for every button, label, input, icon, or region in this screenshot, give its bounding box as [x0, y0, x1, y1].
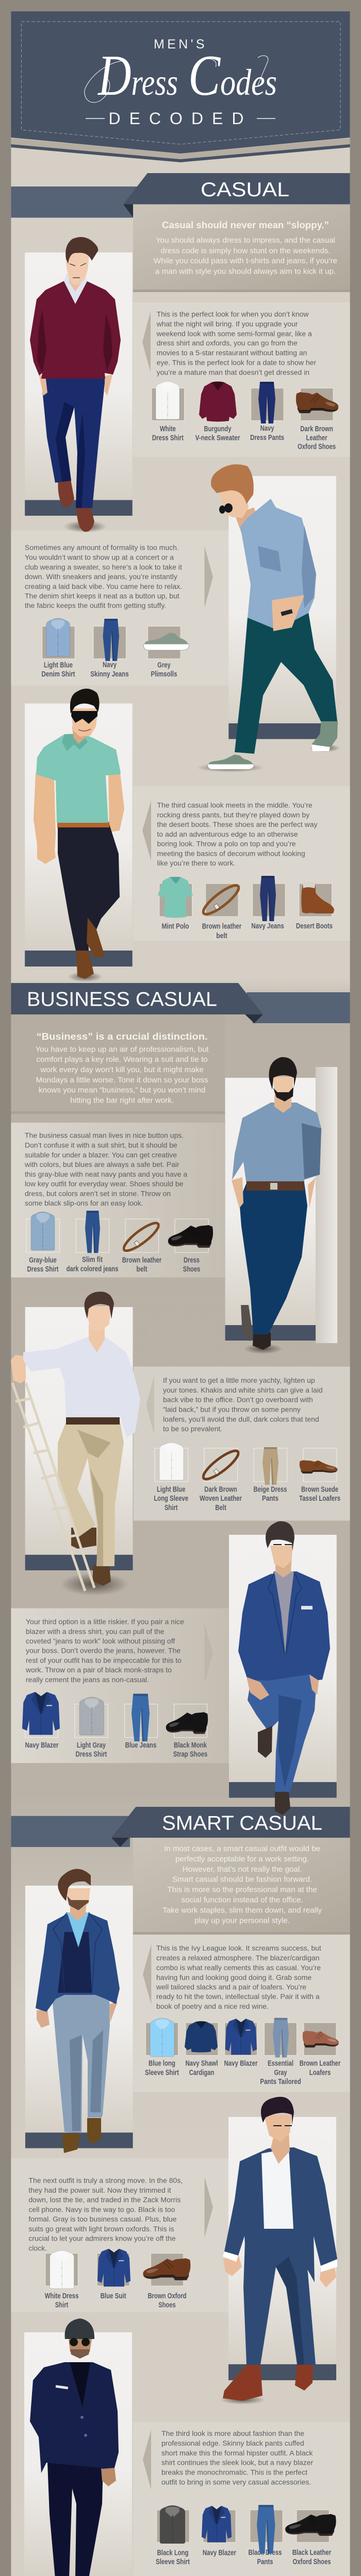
panel: business look 2 description: [134, 1367, 350, 1520]
item: navy dress pants: [250, 382, 284, 442]
description text: You wouldn’t want to show up at a concert or a: [25, 553, 174, 561]
item: blue shirt: Blue long: [149, 2060, 175, 2068]
ladder: [12, 1383, 94, 1591]
description text: [156, 310, 316, 376]
item: black shirt: Sleeve Shirt: [156, 2558, 190, 2566]
description text: blazer with a dress shirt, you can pull of the: [26, 1628, 165, 1636]
item: monk strap shoes: [166, 1704, 208, 1758]
description text: The denim shirt keeps it neat as a button up, but: [25, 591, 179, 600]
description text: breaks the monochromatic. This is the perfect: [161, 2468, 307, 2476]
banner: smart casual: [11, 1807, 350, 1847]
description text: creating a laid back vibe. You came here to relax.: [25, 582, 182, 590]
arrow: [142, 311, 151, 372]
panel: smart casual look 3 description: [133, 2422, 350, 2576]
intro text: While you could pass with t-shirts and jeans, if you’re: [154, 257, 337, 265]
item: black oxford shoes: Oxford Shoes: [293, 2558, 331, 2566]
item: monk strap shoes: Strap Shoes: [173, 1750, 207, 1758]
item: dark jeans: [66, 1211, 119, 1274]
item: denim shirt: Denim Shirt: [41, 670, 75, 679]
arrow: [204, 2177, 213, 2238]
item: brown oxford shoes: Dark Brown: [300, 425, 333, 433]
item: navy blazer: [224, 2019, 258, 2068]
item: woven belt: Dark Brown: [204, 1486, 237, 1494]
description text: low key outfit for everyday wear. Shoes should be: [25, 1179, 184, 1188]
item: dark jeans: dark colored jeans: [66, 1265, 119, 1274]
item: gray pants: Essential: [268, 2060, 293, 2068]
description text: crucial to let your admirers know you’re off the: [28, 2234, 176, 2243]
item: blue shirt: Sleeve Shirt: [145, 2069, 179, 2077]
item: brown loafers: Brown Leather: [300, 2060, 341, 2068]
item: skinny jeans: [90, 619, 129, 679]
description text: dress shirt and oxfords, you can go from the: [157, 339, 298, 347]
item: white dress shirt: Dress Shirt: [152, 434, 184, 442]
description text: eye. This is the perfect look for a date to show her: [157, 358, 316, 366]
description text: the desert boots. These shoes are the perfect way: [157, 820, 318, 828]
item: brown oxford shoes: Brown Oxford: [147, 2292, 187, 2300]
item: tassel loafers: Brown Suede: [301, 1486, 338, 1494]
item: black dress pants: Pants: [257, 2558, 273, 2566]
figure: denim shirt man: [196, 464, 340, 772]
intro text: Smart casual should be fashion forward.: [172, 1875, 312, 1884]
description text: back vibe to the office. Don’t go overboard with: [163, 1396, 313, 1404]
description text: [156, 1944, 321, 2010]
panel: casual look 2 description: [11, 531, 228, 685]
title script: dress codes: Codes: [188, 44, 277, 108]
description text: professional edge. Skinny black pants cuffed: [161, 2439, 304, 2447]
description text: dress, but colors aren’t set in stone. Throw on: [25, 1189, 171, 1197]
item: denim shirt: [41, 618, 75, 679]
item: brown belt: belt: [216, 932, 227, 940]
arrow: [142, 801, 151, 861]
panel: casual look 1 description: [133, 302, 350, 457]
item: brown oxford shoes: Oxford Shoes: [298, 443, 336, 451]
item: burgundy sweater: [195, 381, 240, 442]
figure: cardigan and blazer man: [25, 1869, 133, 2153]
description text: weekend look with some semi-formal gear, like a: [156, 329, 312, 337]
panel: smart casual look 1 description: [133, 1935, 350, 2092]
description text: what the night will bring. If you upgrade your: [156, 319, 298, 328]
intro text: work every day won’t kill you, but it might make: [40, 1065, 204, 1074]
description text: really cement the jeans as non-casual.: [26, 1675, 149, 1684]
item: light gray shirt: Dress Shirt: [76, 1750, 107, 1758]
item: brown oxford shoes: [296, 388, 338, 451]
item: brown belt: Brown leather: [202, 923, 242, 931]
item: navy jeans: [251, 876, 285, 930]
intro text: You should always dress to impress, and the casual: [156, 236, 335, 245]
item: beige pants: Beige Dress: [254, 1486, 287, 1494]
item: burgundy sweater: Burgundy: [204, 425, 231, 433]
item: white dress shirt: White: [160, 425, 176, 433]
item: black shirt: [156, 2505, 190, 2566]
item: plimsolls: [144, 626, 189, 679]
figure: burgundy sweater man: [25, 237, 133, 533]
intro text: [154, 236, 337, 276]
description text: If you want to get a little more yachty, lighten up: [163, 1376, 315, 1384]
intro text: dress code is simply how stunt on the weekends.: [160, 247, 331, 256]
description text: coveted “jeans to work” look without pissing off: [26, 1637, 175, 1645]
intro text: Mondays a little worse. Tone it down so your boss: [36, 1076, 208, 1084]
description text: loafers, you’ll avoid the dull, dark colors that tend: [163, 1415, 319, 1423]
figure: gray-blue shirt man leaning on pillar: [225, 1057, 337, 1354]
item: mint polo: Mint Polo: [162, 923, 189, 931]
figure: white shirt man on ladder: [11, 1292, 140, 1596]
item: navy dress pants: Navy: [260, 425, 274, 433]
description text: formal. Gray is too business casual. Plus, blue: [28, 2215, 177, 2223]
item: brown oxford shoes: Shoes: [158, 2301, 176, 2309]
item: woven belt: Woven Leather: [200, 1495, 242, 1503]
item: black dress pants: [249, 2505, 283, 2566]
description text: to add an adventurous edge to an otherwise: [157, 830, 298, 838]
panel: casual look 3 description: [133, 786, 350, 941]
intro text: comfort plays a key role. Wearing a suit and tie to: [36, 1055, 208, 1064]
description text: rest of your outfit has to be impeccable for this to: [26, 1656, 182, 1665]
item: monk strap shoes: Black Monk: [174, 1741, 207, 1750]
panel: business look 3 description: [11, 1608, 229, 1763]
description text: outfit to bring in some very casual accessories.: [161, 2478, 311, 2486]
header: [11, 11, 350, 162]
banner: smart casual: SMART CASUAL: [162, 1812, 322, 1835]
item: burgundy sweater: V-neck Sweater: [195, 434, 240, 442]
description text: The third casual look meets in the middle. You’re: [157, 801, 313, 809]
arrow: [204, 546, 213, 608]
title line: men's: MEN'S: [154, 37, 207, 52]
item: woven belt: Belt: [215, 1504, 226, 1512]
item: light gray shirt: [75, 1697, 108, 1758]
description text: This is the perfect look for when you don’t know: [157, 310, 309, 318]
item: brown loafers: Loafers: [309, 2069, 331, 2077]
banner: casual: [11, 173, 350, 217]
description text: “laid back,” but if you throw on some penny: [163, 1405, 301, 1414]
item: blue jeans: Blue Jeans: [125, 1741, 156, 1750]
item: gray-blue shirt: [26, 1212, 60, 1274]
figure: navy suit man with red shoes: [220, 2097, 337, 2404]
description text: [163, 1376, 323, 1433]
item: tassel loafers: [299, 1448, 340, 1503]
item: gray pants: [260, 2018, 301, 2086]
item: navy blazer: Navy Blazer: [203, 2549, 236, 2557]
description text: [28, 2176, 183, 2252]
item: light gray shirt: Light Gray: [77, 1741, 106, 1750]
intro text: Take work staples, slim them down, and really: [162, 1906, 322, 1914]
description text: This is the Ivy League look. It screams success, but: [156, 1944, 321, 1952]
item: plimsolls: Plimsolls: [151, 670, 177, 679]
item: black shirt: Black Long: [157, 2549, 189, 2557]
item: navy blazer: [22, 1692, 60, 1750]
item: navy shawl cardigan: Cardigan: [189, 2069, 214, 2077]
item: brown belt: belt: [136, 1265, 147, 1274]
intro text: You have to keep up an air of professionalism, but: [35, 1045, 209, 1054]
item: navy blazer: Navy Blazer: [224, 2060, 258, 2068]
description text: having fun and looking good doing it. Grab some: [156, 1973, 311, 1981]
figure: beanie and dark blazer man: [24, 2318, 132, 2576]
description text: Sometimes any amount of formality is too much.: [25, 543, 179, 551]
item: plimsolls: Grey: [157, 662, 171, 670]
item: desert boots: [296, 883, 334, 930]
description text: clock.: [28, 2244, 47, 2252]
description text: club wearing a sweater, so here’s a look to take it: [25, 563, 182, 571]
item: blue shirt: [145, 2018, 179, 2077]
figure: mint polo man: [25, 689, 133, 982]
description text: creates a relaxed atmosphere. The blazer/cardigan: [156, 1954, 319, 1962]
figure: navy blazer and jeans man: [229, 1521, 337, 1815]
description text: boring look. Throw a polo on top and you’re: [157, 839, 296, 848]
item: beige pants: Pants: [262, 1495, 278, 1503]
panel: business intro: [11, 1014, 225, 1114]
title script: dress codes: [85, 44, 277, 108]
description text: combo is what really cements this as casual. You’re: [156, 1963, 321, 1972]
item: black dress pants: Black Dress: [249, 2549, 282, 2557]
description text: [24, 1131, 187, 1207]
description text: some black slip-ons for an easy look.: [25, 1199, 143, 1207]
panel: casual intro: [133, 204, 350, 292]
item: navy blazer: [202, 2506, 236, 2557]
intro text: However, that’s not really the goal.: [183, 1865, 302, 1874]
item: tassel loafers: Tassel Loafers: [299, 1495, 340, 1503]
arrow: [143, 1944, 151, 2005]
intro text: This is more so the professional man at the: [167, 1886, 317, 1894]
item: light shirt: Light Blue: [157, 1486, 185, 1494]
item: blue jeans: [125, 1694, 158, 1750]
item: navy jeans: Navy Jeans: [251, 922, 284, 930]
description text: The business casual man lives in nice button ups.: [25, 1131, 184, 1140]
description text: [161, 2429, 314, 2486]
arrow: [143, 2430, 151, 2489]
item: dark jeans: Slim fit: [82, 1256, 103, 1264]
banner: casual: CASUAL: [201, 179, 289, 201]
item: denim shirt: Light Blue: [44, 662, 73, 670]
intro text: In most cases, a smart casual outfit would be: [164, 1844, 320, 1853]
description text: you’re a mature man that doesn’t get dressed in: [157, 368, 309, 376]
item: gray-blue shirt: Gray-blue: [29, 1256, 57, 1264]
item: black oxford shoes: [285, 2510, 336, 2566]
item: black dress shoes: Dress: [184, 1256, 200, 1264]
item: brown oxford shoes: Leather: [306, 434, 327, 442]
description text: the fabric keeps the outfit from getting stuffy.: [25, 601, 166, 609]
item: gray-blue shirt: Dress Shirt: [27, 1265, 59, 1274]
item: light shirt: Shirt: [165, 1504, 178, 1512]
description text: down, lost the tie, and traded in the Zack Morris: [28, 2195, 180, 2204]
item: desert boots: Desert Boots: [296, 922, 333, 930]
item: blue suit: Blue Suit: [101, 2292, 126, 2300]
description text: they had the power suit. Now they trimmed it: [28, 2186, 171, 2194]
intro heading: “Business” is a crucial distinction.: [37, 1031, 208, 1042]
title script: dress codes: Dress: [97, 44, 178, 108]
item: skinny jeans: Skinny Jeans: [90, 670, 129, 679]
item: light shirt: Long Sleeve: [154, 1495, 188, 1503]
item: white shirt: White Dress: [45, 2292, 78, 2300]
description text: work. Throw on a pair of black monk-straps to: [25, 1666, 172, 1674]
item: woven belt: [200, 1447, 242, 1512]
description text: The third look is more about fashion than the: [161, 2429, 304, 2437]
intro text: knows you mean “business,” but you won’t mind: [39, 1086, 205, 1095]
description text: down. With sneakers and jeans, you’re instantly: [25, 572, 177, 581]
description text: short make this the formal hipster outfit. A black: [161, 2449, 313, 2457]
item: navy shawl cardigan: Navy Shawl: [186, 2060, 218, 2068]
description text: your boss. Don’t overdo the jeans, however. The: [26, 1647, 180, 1655]
description text: [25, 543, 182, 609]
item: light shirt: [154, 1443, 188, 1512]
item: skinny jeans: Navy: [103, 661, 117, 669]
item: brown belt: [200, 882, 242, 940]
description text: suits go great with light brown oxfords. This is: [28, 2225, 174, 2233]
item: mint polo: [158, 877, 193, 931]
description text: rocking dress pants, but they’re played down by: [157, 810, 309, 819]
description text: suitable for under a blazer. You can get creative: [25, 1150, 177, 1159]
description text: cell phone. Navy is the way to go. Black is too: [28, 2205, 175, 2213]
item: gray pants: Pants Tailored: [260, 2078, 301, 2086]
description text: ready to hit the town, intellectual style. Pair it with a: [156, 1992, 320, 2001]
item: beige pants: [254, 1447, 287, 1503]
description text: [157, 801, 318, 867]
description text: meeting the basics of decorum without looking: [157, 849, 305, 857]
description text: with colors, but blues are always a safe bet. Pair: [24, 1160, 179, 1168]
panel: smart casual intro: [133, 1838, 350, 1935]
item: black oxford shoes: Black Leather: [292, 2549, 332, 2557]
arrow: [146, 1376, 154, 1435]
description text: movies to a 5-star restaurant without batting an: [157, 348, 307, 357]
item: white dress shirt: [152, 381, 185, 442]
item: black dress shoes: Shoes: [183, 1265, 200, 1274]
panel: business look 1 description: [11, 1123, 225, 1278]
item: navy dress pants: Dress Pants: [250, 434, 284, 442]
item: white shirt: Shirt: [55, 2301, 68, 2309]
banner: business casual: [11, 983, 350, 1023]
title line: decoded: DECODED: [108, 109, 253, 128]
item: brown oxford shoes: [143, 2253, 190, 2309]
description text: this gray-blue with neat navy pants and you have a: [25, 1170, 187, 1178]
intro text: hitting the bar right after work.: [70, 1096, 174, 1105]
description text: book of poetry and a nice red wine.: [156, 2002, 269, 2010]
intro text: play up your personal style.: [194, 1916, 290, 1925]
banner: business casual: BUSINESS CASUAL: [27, 989, 217, 1011]
intro text: [162, 1844, 322, 1925]
item: blue suit: [97, 2249, 130, 2300]
intro text: [35, 1045, 209, 1105]
item: black dress shoes: [168, 1219, 213, 1274]
description text: well tailored slacks and a pair of loafers. You’re: [156, 1982, 306, 1991]
description text: Your third option is a little riskier. If you pair a nice: [26, 1618, 184, 1626]
item: gray pants: Gray: [274, 2069, 287, 2077]
item: navy shawl cardigan: [185, 2021, 218, 2077]
item: white shirt: [45, 2250, 78, 2309]
description text: Don’t confuse it with a suit shirt, but it should be: [25, 1141, 177, 1149]
intro text: a man with style you should always aim to kick it up.: [155, 267, 336, 276]
item: navy blazer: Navy Blazer: [25, 1741, 59, 1750]
arrow: [204, 1623, 213, 1683]
description text: like you’re there to work.: [157, 859, 235, 867]
intro text: perfectly acceptable for a work setting.: [175, 1855, 309, 1863]
item: brown loafers: [300, 2023, 341, 2077]
description text: to be so prevalent.: [163, 1425, 222, 1433]
description text: The next outfit is truly a strong move. In the 80s,: [28, 2176, 183, 2184]
description text: your tones. Khakis and white shirts can give a laid: [163, 1386, 323, 1394]
item: brown belt: [121, 1219, 162, 1274]
panel: smart casual look 2 description: [11, 2158, 228, 2312]
intro text: social function instead of the office.: [182, 1895, 303, 1904]
item: brown belt: Brown leather: [122, 1256, 162, 1264]
arrow: [204, 1138, 213, 1197]
description text: [25, 1618, 184, 1684]
description text: shirt continues the sleek look, but a navy blazer: [161, 2459, 314, 2467]
intro heading: Casual should never mean “sloppy.”: [162, 220, 329, 230]
